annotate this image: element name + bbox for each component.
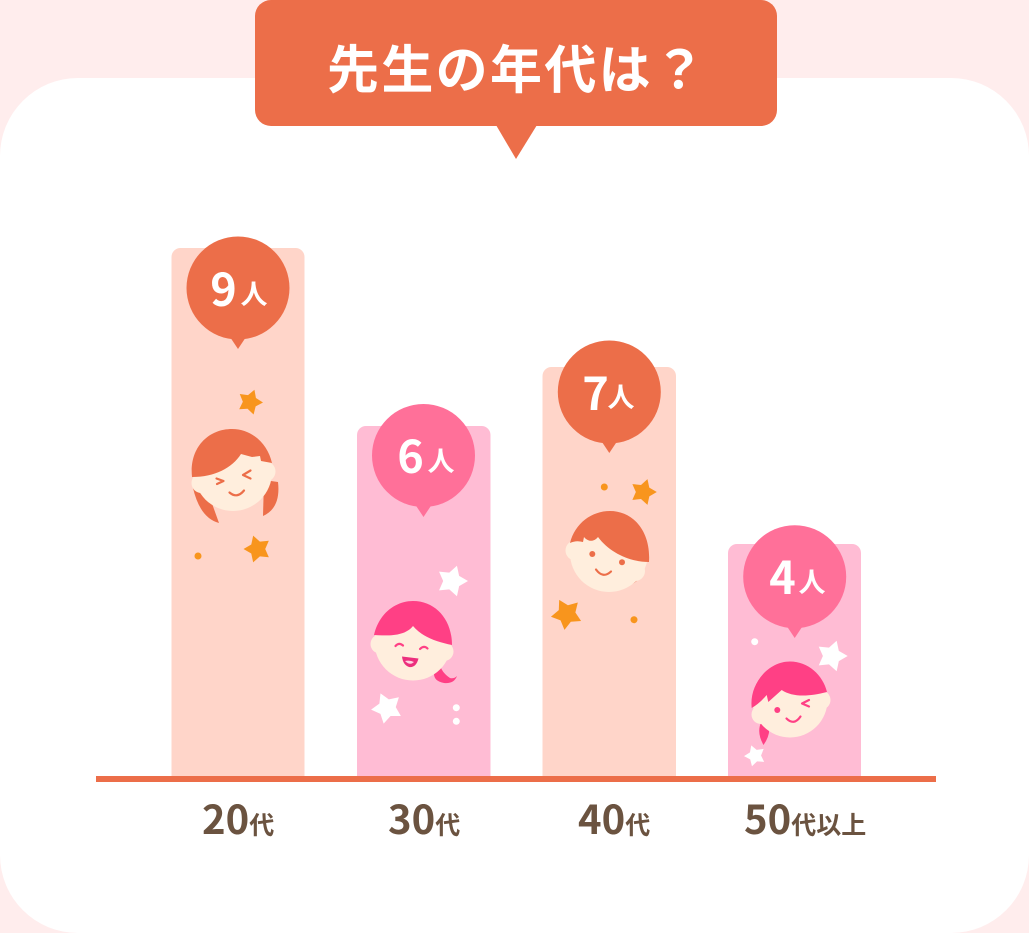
icon: boy face (566, 511, 649, 592)
icon: dot (194, 552, 202, 560)
bar: 20代 (172, 236, 304, 777)
icon: star (367, 687, 406, 726)
axis label: 30代: 30代 (388, 788, 460, 846)
axis label: 50代以上: 50代以上 (744, 788, 866, 846)
bar: 50代以上 (728, 525, 861, 777)
bar: 30代 (357, 404, 490, 777)
icon: dot (751, 638, 758, 645)
icon: woman face, winking (751, 662, 830, 745)
icon: star (628, 475, 660, 506)
value bubble: 4人 (743, 525, 846, 638)
value bubble: 7人 (558, 340, 661, 453)
icon: star (434, 561, 471, 598)
icon: star (813, 636, 851, 673)
icon: woman face, smiling (370, 601, 457, 683)
value bubble: 4人: 4 (769, 542, 796, 607)
value bubble: 9人: 人 (240, 273, 268, 312)
value bubble: 9人 (186, 236, 290, 349)
value bubble: 6人: 6 (397, 421, 424, 486)
icon: star (546, 593, 586, 633)
title: 先生の年代は？ (327, 28, 705, 104)
value bubble: 9人: 9 (210, 254, 237, 319)
icon: dot (453, 718, 460, 725)
axis label: 20代: 20代 (202, 788, 274, 846)
icon: dot (601, 484, 608, 490)
value bubble: 6人 (372, 404, 475, 517)
value bubble: 7人: 7 (582, 358, 609, 423)
bar: 40代 (542, 340, 676, 777)
icon: star (741, 742, 768, 768)
axis baseline (96, 776, 936, 782)
icon: star (235, 386, 266, 416)
icon: star (241, 532, 274, 564)
value bubble: 4人: 人 (798, 561, 826, 600)
value bubble: 7人: 人 (608, 376, 634, 415)
icon: dot (453, 704, 460, 711)
value bubble: 6人: 人 (428, 440, 454, 479)
axis label: 40代: 40代 (578, 788, 650, 846)
icon: dot (630, 616, 638, 623)
icon: woman face, eyes closed (192, 429, 278, 523)
title banner (255, 0, 777, 159)
